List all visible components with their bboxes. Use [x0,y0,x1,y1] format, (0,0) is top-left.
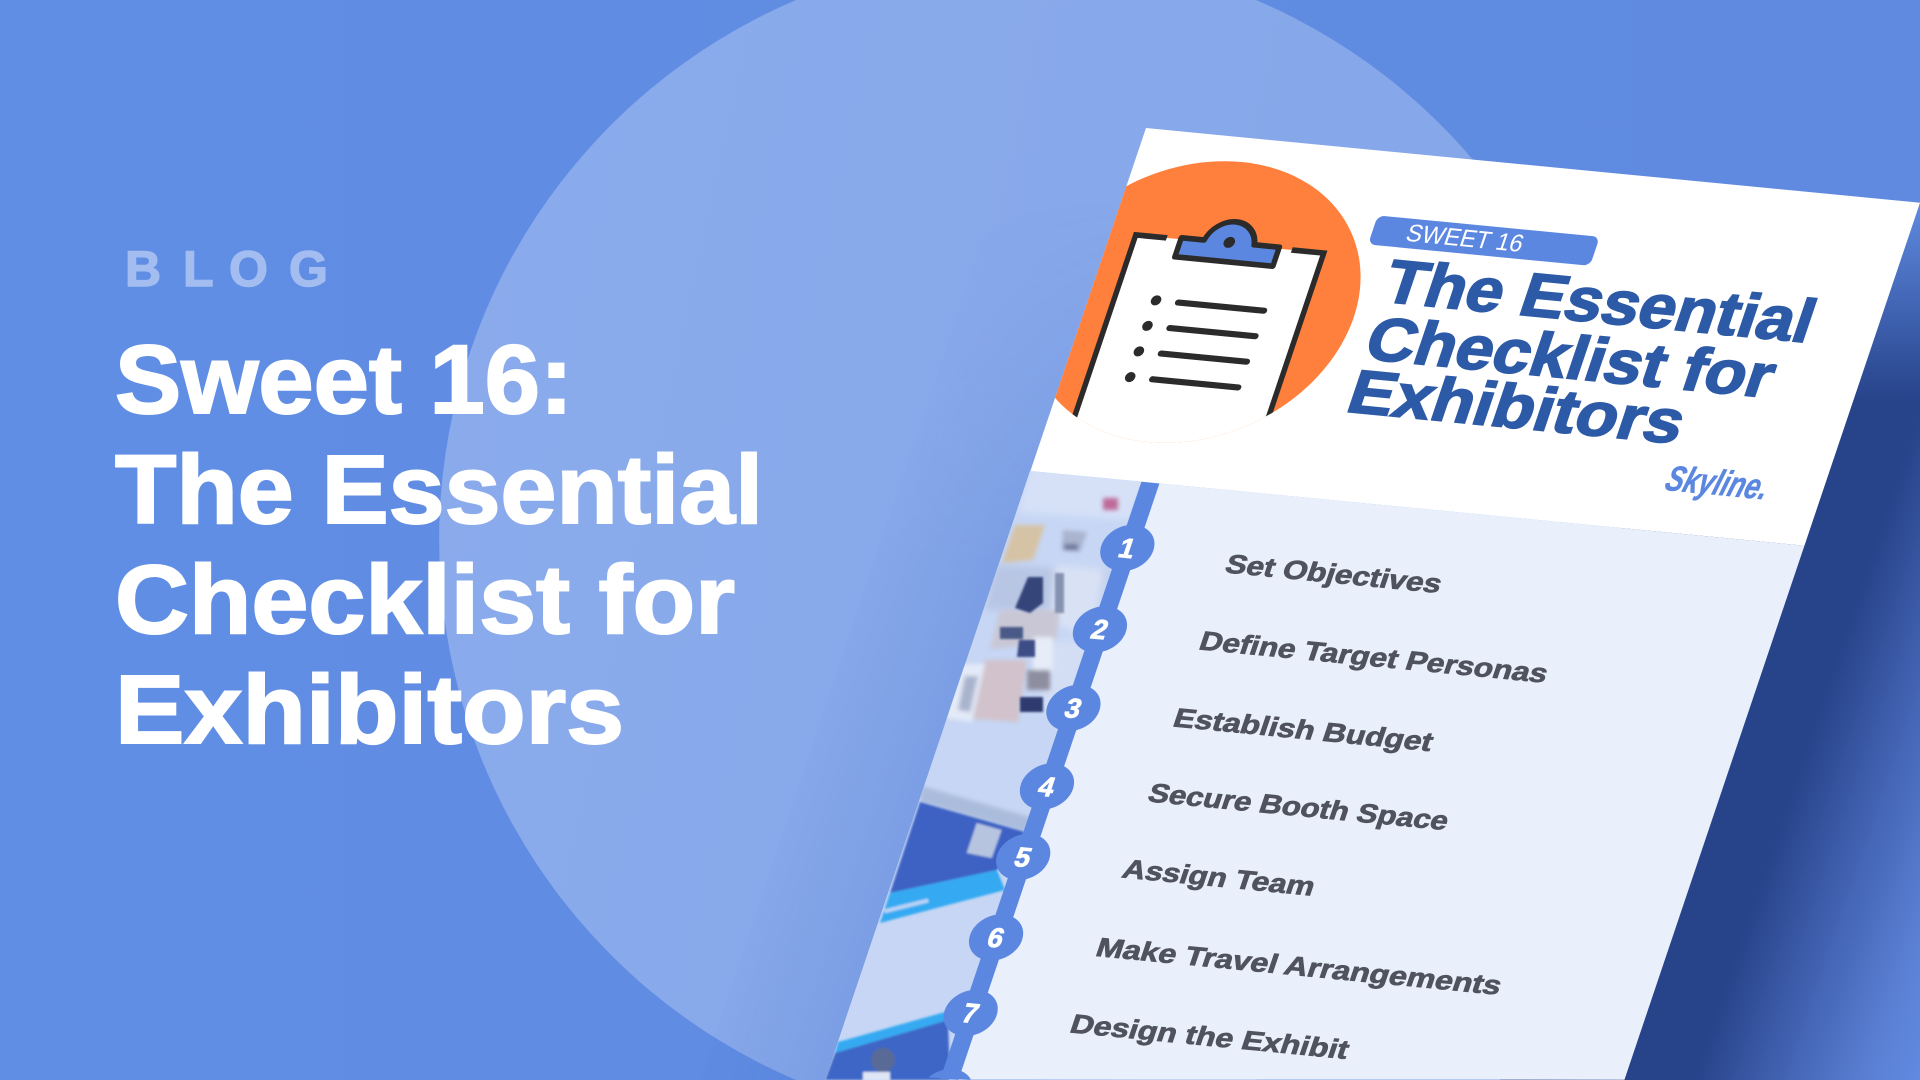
page header background [1030,128,1920,546]
skyline logo: Skyline. [1661,458,1775,507]
sheet title: Exhibitors [1339,358,1695,457]
sheet title: The Essential [1375,248,1825,356]
numbered timeline markers [922,522,1161,1080]
checklist page content [928,161,1818,1080]
checklist items: Make Travel Arrangements [1092,932,1506,1001]
main title [115,325,763,764]
main title: Sweet 16: [115,325,573,434]
right page shadow [1500,160,1920,1080]
sweet 16 pill [1368,215,1600,266]
numbered timeline markers: 6 [983,922,1009,954]
main title: The Essential [115,435,763,544]
sweet 16 pill: SWEET 16 [1402,220,1527,258]
clipboard [1072,219,1328,443]
checklist items: Establish Budget [1170,703,1438,757]
checklist page sheet [825,128,1920,1080]
checklist items [1066,549,1635,1077]
checklist items: Design the Exhibit [1066,1009,1353,1065]
numbered timeline markers: 2 [1087,614,1112,645]
checklist items: Assign Team [1119,854,1320,901]
blog label: BLOG [125,241,328,297]
numbered timeline markers: 3 [1061,692,1086,724]
left page shade [780,446,1038,1080]
main title: Exhibitors [115,655,624,764]
page body background [825,471,1804,1080]
sheet title [1338,248,1825,466]
numbered timeline markers: 7 [958,997,983,1029]
blurred photo strip [825,465,1150,1080]
numbered timeline markers: 5 [1011,841,1036,873]
timeline bar [940,482,1159,1080]
numbered timeline markers: 4 [1034,771,1060,803]
checklist items: Define Target Personas [1196,626,1552,689]
checklist items: Set Objectives [1221,549,1446,599]
checklist items: Secure Booth Space [1144,778,1453,836]
sheet title: Checklist for [1357,305,1785,411]
orange circle [1055,161,1361,443]
numbered timeline markers: 1 [1115,532,1140,564]
background circle [439,0,1613,1080]
main title: Checklist for [115,545,735,654]
header icon: clipboard on orange circle [1055,161,1361,443]
